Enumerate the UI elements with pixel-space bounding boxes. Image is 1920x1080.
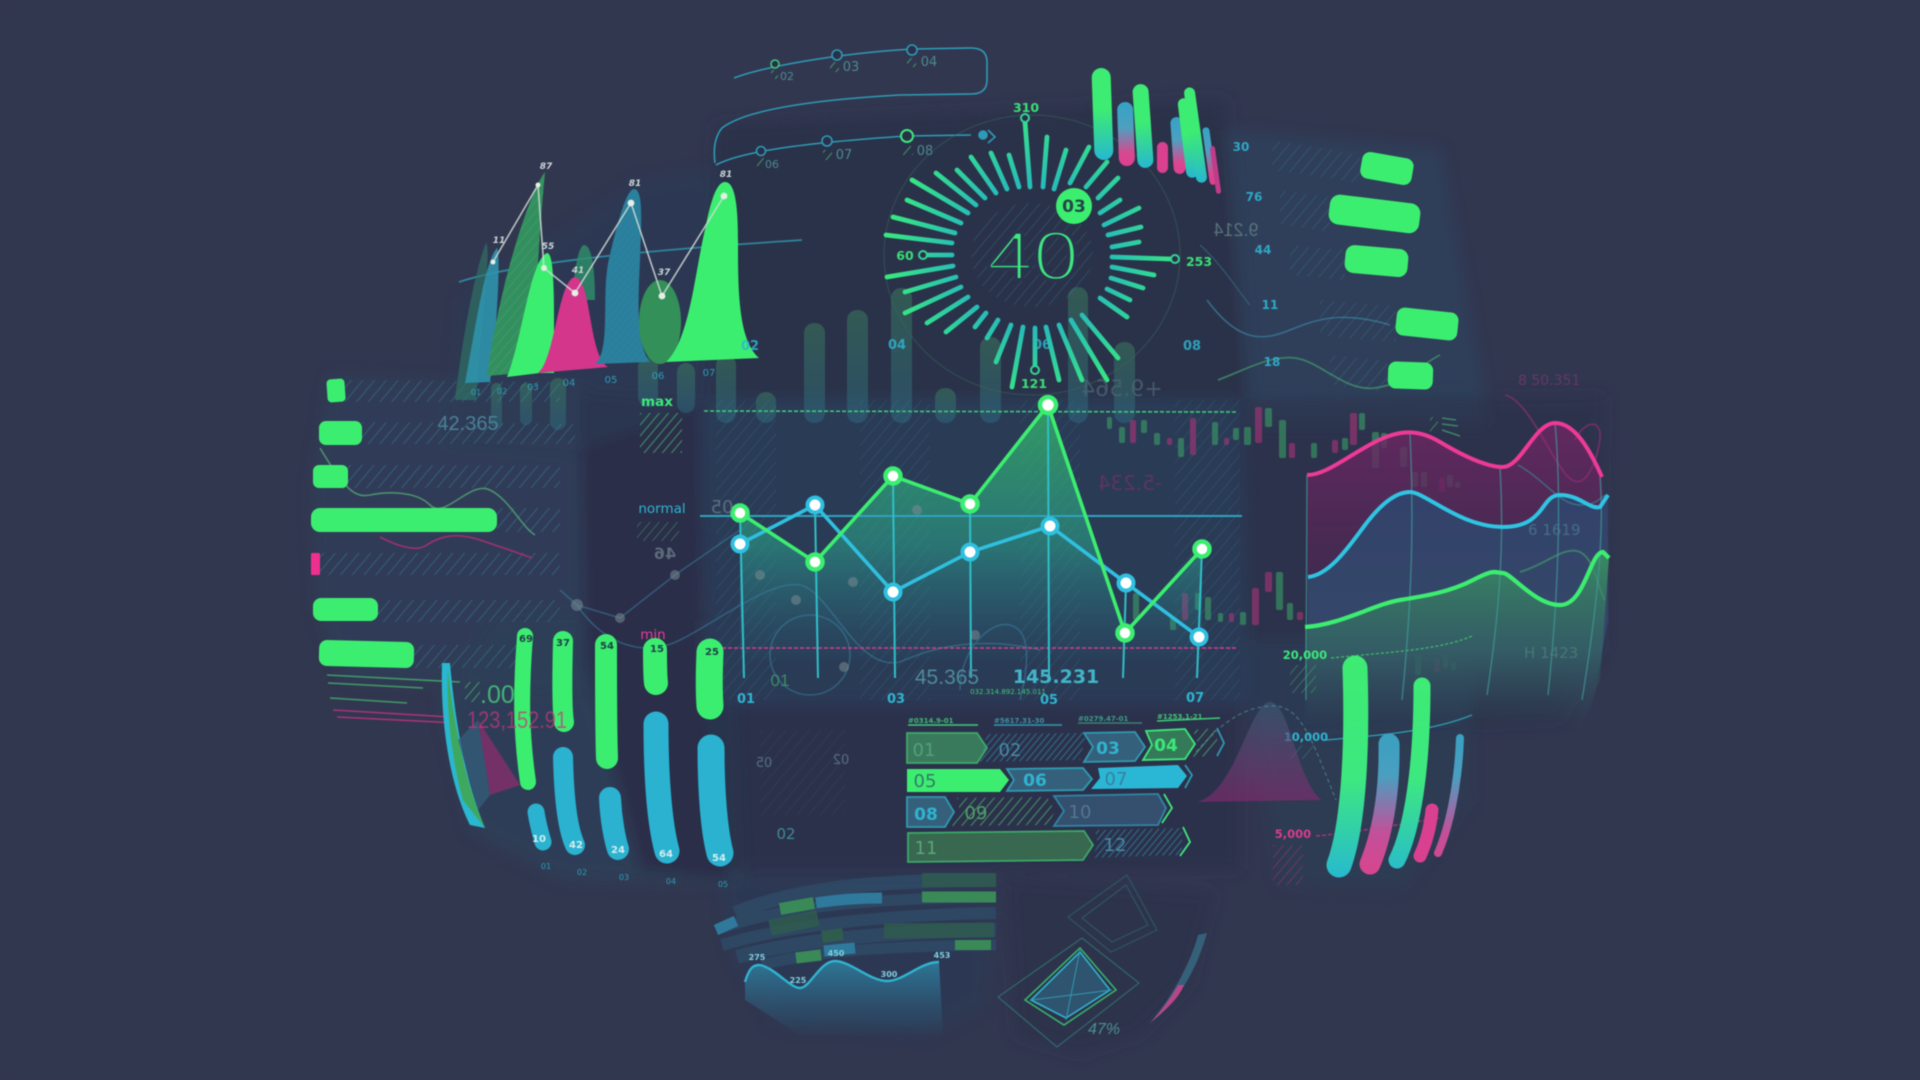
bell x axis labels: 03 bbox=[527, 383, 539, 393]
bar values top: 69 bbox=[519, 634, 533, 645]
green series bbox=[740, 405, 1202, 633]
row 2 labels: 07 bbox=[1105, 769, 1127, 790]
dim axis labels: 08 bbox=[1183, 339, 1201, 354]
bar values bottom: 54 bbox=[712, 853, 726, 864]
chevrons row 2 bbox=[907, 765, 1192, 792]
hatched blue bell 81 bbox=[595, 189, 650, 364]
cyan series bbox=[740, 505, 1199, 637]
wave area bbox=[745, 961, 943, 1035]
hatched disk bbox=[971, 203, 1093, 307]
main line chart bbox=[560, 377, 1242, 708]
pink readout over bars: 123,152.91 bbox=[467, 707, 567, 734]
lower radar bbox=[998, 938, 1139, 1047]
scale labels: 76 bbox=[1246, 190, 1262, 204]
cyan bars bbox=[536, 724, 720, 853]
area under cyan bbox=[1308, 492, 1608, 720]
green line bbox=[1305, 552, 1609, 627]
list icon bbox=[1430, 417, 1460, 436]
bar axis labels: 03 bbox=[619, 873, 629, 882]
area under pink bbox=[1307, 423, 1608, 600]
scale labels: 18 bbox=[1264, 355, 1280, 369]
bell x axis labels: 04 bbox=[563, 378, 575, 389]
green bars bbox=[1328, 151, 1459, 390]
bell x axis labels: 05 bbox=[605, 375, 617, 386]
timeline labels: 07 bbox=[836, 148, 852, 163]
panel readouts: 6 1619 bbox=[1528, 521, 1580, 539]
bottom right vertical bars bbox=[1273, 636, 1472, 885]
bright green bell 55 bbox=[507, 253, 554, 377]
column headers: #5617.31-30 bbox=[994, 717, 1045, 725]
curved row segments bbox=[716, 880, 996, 958]
dim axis labels: 04 bbox=[888, 338, 906, 353]
hatch columns in main chart bbox=[716, 400, 1240, 815]
wave labels: 225 bbox=[790, 976, 807, 985]
bar values top: 15 bbox=[650, 644, 664, 655]
green bars bbox=[522, 636, 710, 782]
row 1 labels: 04 bbox=[1154, 736, 1178, 756]
drop lines bbox=[740, 405, 1202, 678]
scale labels: 30 bbox=[1233, 140, 1249, 154]
row 2 labels: 06 bbox=[1023, 771, 1047, 791]
bar values top: 25 bbox=[705, 647, 719, 658]
pink line bbox=[1307, 423, 1602, 477]
timeline one bbox=[714, 48, 987, 163]
chart readouts: 032.314.892.145.011 bbox=[970, 688, 1046, 696]
wave labels: 275 bbox=[749, 953, 766, 962]
faint ring bbox=[884, 115, 1180, 395]
mirrored value 9.214: 9.214 bbox=[1213, 220, 1259, 240]
curved row bases bbox=[716, 880, 996, 965]
panel readouts: H 1423 bbox=[1524, 644, 1578, 662]
top right vertical bars bbox=[1091, 68, 1221, 194]
pink candles bbox=[1130, 407, 1445, 672]
tick end markers bbox=[919, 114, 1179, 374]
bell chart trend line bbox=[493, 185, 724, 296]
bell x axis labels bbox=[471, 368, 715, 397]
bell value labels: 41 bbox=[571, 266, 584, 276]
row 1 labels bbox=[913, 736, 1178, 761]
x axis labels: 01 bbox=[737, 692, 755, 707]
wave labels bbox=[749, 949, 950, 985]
hatch icon bbox=[465, 682, 480, 702]
bell value labels: 81 bbox=[720, 170, 732, 180]
candlestick layer bbox=[1107, 407, 1460, 675]
gauge labels: 121 bbox=[1021, 376, 1047, 391]
green markers bbox=[732, 397, 1210, 640]
mirrored faint readouts: -5.234 bbox=[1098, 471, 1162, 495]
hatch rows bbox=[1272, 140, 1396, 392]
dim axis labels bbox=[741, 338, 1201, 354]
panel readouts bbox=[1518, 373, 1580, 662]
right crescent bbox=[1150, 933, 1207, 1023]
threshold hatches bbox=[640, 413, 682, 453]
small green bell bbox=[572, 245, 595, 300]
bell x axis labels: 01 bbox=[471, 388, 481, 397]
row 1 labels: 01 bbox=[913, 740, 935, 761]
badge 03: 03 bbox=[1062, 197, 1086, 217]
left panel: horizontal bars bbox=[311, 378, 575, 723]
row 3 labels: 10 bbox=[1069, 802, 1091, 823]
bar values bottom: 10 bbox=[532, 834, 546, 845]
chart readouts: 145.231 bbox=[1013, 666, 1099, 688]
threshold labels: normal bbox=[638, 501, 686, 517]
threshold labels bbox=[638, 394, 686, 643]
row 1 labels: 03 bbox=[1096, 739, 1120, 759]
chevron arrow bbox=[988, 130, 995, 143]
bell value labels: 81 bbox=[629, 179, 641, 189]
scale lines bbox=[1316, 636, 1472, 836]
timeline hatch icons bbox=[757, 58, 916, 167]
panel readouts: 8 50.351 bbox=[1518, 373, 1580, 389]
mirrored faint readouts bbox=[654, 377, 1163, 563]
bar values bottom bbox=[532, 834, 726, 864]
badge 03 bbox=[1056, 188, 1092, 224]
scale labels: 44 bbox=[1255, 243, 1271, 257]
bar axis labels: 05 bbox=[718, 880, 728, 889]
wedge chart bbox=[442, 663, 520, 828]
row 3 labels bbox=[914, 802, 1091, 825]
scale labels bbox=[1275, 648, 1328, 841]
hatched green bell bbox=[487, 172, 545, 376]
dark green bell 37 bbox=[639, 280, 681, 364]
bar values top: 37 bbox=[556, 638, 570, 649]
sphere panels backdrop bbox=[311, 100, 1605, 1055]
threshold labels: max bbox=[641, 394, 673, 410]
bar axis labels: 01 bbox=[541, 862, 551, 871]
x axis labels bbox=[737, 691, 1204, 708]
bar values bottom: 24 bbox=[611, 845, 625, 856]
row 1 labels: 02 bbox=[999, 740, 1021, 761]
small list lines bbox=[327, 675, 460, 723]
column headers: #0279.47-01 bbox=[1078, 715, 1129, 723]
timeline labels: 08 bbox=[917, 144, 933, 159]
green candles bbox=[1107, 408, 1460, 675]
bell value labels: 87 bbox=[540, 162, 553, 172]
threshold labels: min bbox=[640, 627, 666, 643]
grid verticals bbox=[1306, 423, 1601, 700]
right wave chart bbox=[1305, 373, 1609, 730]
x axis labels: 03 bbox=[887, 692, 905, 707]
column headers: #0314.9-01 bbox=[908, 717, 954, 725]
pink bar bbox=[311, 553, 320, 575]
row 4 labels bbox=[915, 835, 1126, 859]
chart readouts: 01 bbox=[771, 671, 789, 690]
wave labels: 453 bbox=[934, 951, 950, 960]
network nodes bbox=[571, 505, 980, 672]
bell value labels: 55 bbox=[542, 242, 554, 252]
bar values bottom: 64 bbox=[659, 849, 673, 860]
bar axis labels bbox=[541, 862, 728, 889]
radar charts bbox=[998, 875, 1207, 1047]
centre value: 40 bbox=[987, 217, 1079, 295]
chevrons row 3 bbox=[907, 794, 1172, 827]
cyan line bbox=[1308, 492, 1608, 577]
middle lower bars bbox=[442, 634, 849, 889]
scale hatches bbox=[1290, 665, 1316, 693]
chevron table bbox=[907, 713, 1224, 862]
dim axis labels: 06 bbox=[1033, 338, 1051, 353]
column headers: #1253.1-21 bbox=[1157, 713, 1203, 721]
upper radar bbox=[1068, 875, 1157, 952]
top timelines bbox=[714, 45, 995, 171]
row 4 labels: 12 bbox=[1104, 835, 1126, 856]
timeline labels: 02 bbox=[780, 70, 794, 83]
chart readouts: 45.365 bbox=[915, 666, 979, 689]
bar axis labels: 02 bbox=[577, 868, 587, 877]
bell x axis labels: 07 bbox=[703, 368, 715, 379]
dim panel labels: 05 bbox=[756, 756, 772, 771]
bell value labels: 37 bbox=[658, 268, 671, 278]
hatch rows bbox=[320, 380, 575, 668]
wave labels: 450 bbox=[828, 949, 845, 958]
bar axis labels: 04 bbox=[666, 877, 676, 886]
row 2 labels: 05 bbox=[914, 771, 936, 792]
far bells bbox=[455, 243, 488, 400]
gauge labels: 253 bbox=[1186, 254, 1212, 269]
pink distribution bell bbox=[1196, 702, 1336, 802]
scale labels: 20,000 bbox=[1283, 648, 1327, 662]
bell curve chart bbox=[455, 162, 1201, 400]
threshold lines bbox=[700, 411, 1242, 648]
gauge labels: 310 bbox=[1013, 100, 1039, 115]
mirrored candle backdrop curves bbox=[1505, 395, 1600, 482]
column headers bbox=[908, 713, 1203, 725]
green bars bbox=[311, 378, 497, 668]
chevrons row 4 bbox=[908, 827, 1190, 862]
dim panel labels: 02 bbox=[833, 753, 849, 768]
wave line bbox=[745, 961, 939, 988]
bell x axis labels: 06 bbox=[652, 371, 664, 382]
bell value labels bbox=[493, 162, 732, 278]
gauge bbox=[884, 100, 1212, 395]
scale labels: 11 bbox=[1262, 298, 1278, 312]
timeline two bbox=[716, 135, 971, 165]
bell x axis labels: 02 bbox=[497, 387, 507, 396]
bar values top bbox=[519, 634, 719, 658]
cyan markers bbox=[732, 498, 1206, 644]
gauge labels bbox=[896, 100, 1212, 391]
scale labels: 10,000 bbox=[1284, 730, 1328, 744]
dim panel labels: 02 bbox=[776, 825, 796, 843]
chart readouts bbox=[771, 666, 1099, 696]
network background bbox=[560, 530, 1040, 700]
scale labels: 5,000 bbox=[1275, 827, 1311, 841]
mirrored faint readouts: 05 bbox=[711, 497, 733, 518]
faint readout: 42.365 bbox=[437, 413, 499, 435]
x axis labels: 07 bbox=[1186, 691, 1204, 706]
gauge labels: 60 bbox=[896, 248, 914, 263]
right top panel bbox=[1200, 140, 1459, 392]
bar values bottom: 42 bbox=[569, 840, 583, 851]
area fill bbox=[740, 405, 1202, 660]
row 3 labels: 08 bbox=[914, 805, 938, 825]
header rules bbox=[908, 718, 1220, 725]
chevrons row 1 bbox=[907, 728, 1224, 763]
mirrored faint readouts: 46 bbox=[654, 544, 676, 563]
timeline labels bbox=[765, 55, 937, 171]
radar value: 47% bbox=[1088, 1021, 1120, 1038]
bars bbox=[1339, 668, 1460, 865]
row 4 labels: 11 bbox=[915, 838, 937, 859]
dim panel labels bbox=[756, 753, 849, 843]
bell value labels: 11 bbox=[493, 236, 505, 246]
timeline labels: 04 bbox=[921, 55, 937, 70]
bottom left curved table and wave bbox=[716, 880, 996, 1035]
readout: .000 bbox=[480, 681, 529, 709]
bar values top: 54 bbox=[600, 641, 614, 652]
dim axis labels: 02 bbox=[741, 339, 759, 354]
area under green bbox=[1305, 552, 1609, 730]
row 2 labels bbox=[914, 769, 1127, 792]
pink bell 41 bbox=[538, 277, 608, 373]
row 3 labels: 09 bbox=[965, 803, 987, 824]
radial ticks bbox=[886, 122, 1170, 387]
timeline labels: 06 bbox=[765, 158, 779, 171]
trend lines bbox=[320, 448, 535, 535]
trend markers bbox=[490, 182, 727, 299]
baseline bbox=[459, 240, 802, 282]
bright green bell 81 bbox=[666, 182, 759, 362]
timeline labels: 03 bbox=[843, 60, 859, 75]
mirrored faint readouts: +9.564 bbox=[1081, 377, 1163, 402]
faint curves bbox=[1207, 300, 1390, 337]
wave labels: 300 bbox=[881, 970, 898, 979]
scale labels bbox=[1233, 140, 1280, 369]
timeline markers bbox=[756, 45, 987, 156]
faded background bar chart bbox=[491, 287, 1135, 430]
x axis labels: 05 bbox=[1040, 693, 1058, 708]
